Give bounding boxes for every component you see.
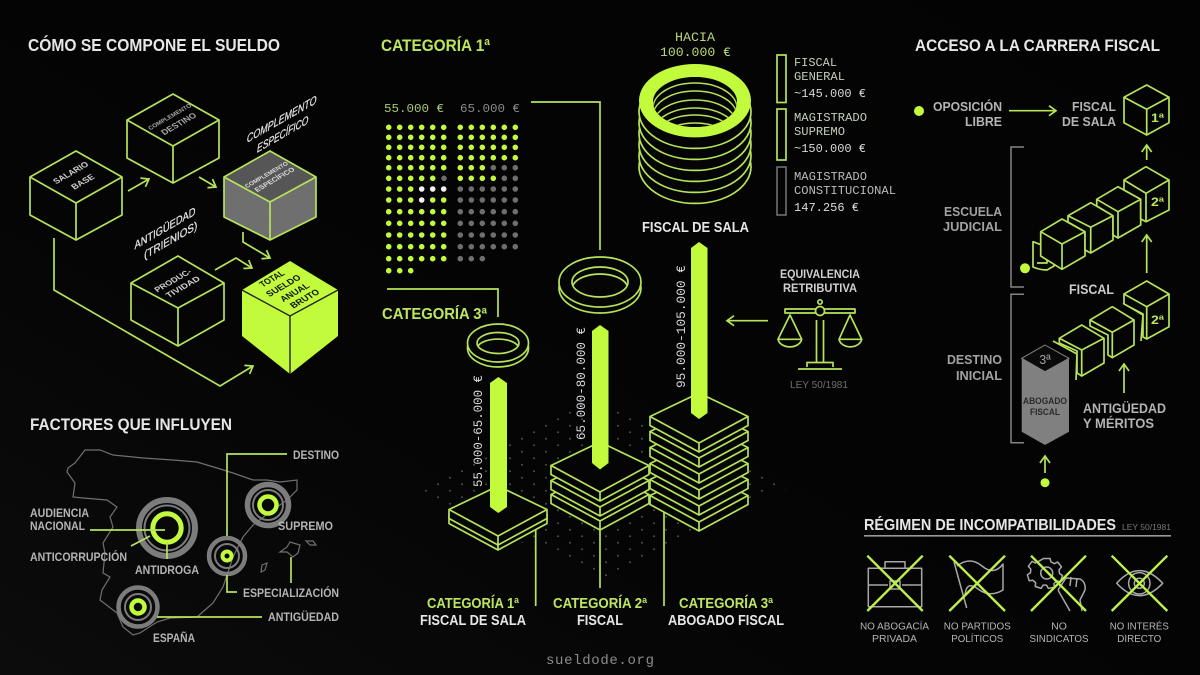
cube: total sueldo anual bruto: SUELDO: [264, 273, 304, 299]
label: complemento específico: ESPECÍFICO: [257, 113, 308, 156]
label: categoría 1ª fiscal de sala: FISCAL DE SALA: [420, 613, 526, 629]
map labels: DESTINO: [293, 448, 339, 462]
label: categoría 2ª fiscal: [553, 595, 648, 629]
cube: complemento destino: COMPLEMENTO: [147, 103, 193, 132]
label: antigüedad trienios: ANTIGÜEDAD: [135, 206, 195, 252]
label: antigüedad y méritos: Y MÉRITOS: [1083, 416, 1154, 431]
cubes: fiscal: [1053, 281, 1169, 380]
panel: régimen de incompatibilidades: [860, 517, 1172, 645]
bar: 65.000-80.000 €: [574, 325, 608, 470]
arrow: ingreso a 3ª: [1044, 456, 1046, 473]
bracket: destino inicial: [1011, 294, 1024, 443]
leader lines: [90, 454, 291, 617]
arrow to pillar: [727, 320, 768, 322]
map labels: NACIONAL: [30, 519, 85, 533]
label: no partidos políticos: [944, 620, 1011, 645]
arrow: oposición a fiscal de sala: [1009, 110, 1056, 112]
ring: categoría 2ª: [559, 257, 641, 313]
label: escuela judicial: JUDICIAL: [943, 219, 1002, 234]
cube: total sueldo anual bruto: [242, 261, 338, 374]
legend: comparación salarial: GENERAL: [794, 70, 845, 84]
panel: composición del sueldo: [28, 34, 338, 386]
panel: factores que influyen: [30, 415, 339, 645]
rings: audiencia nacional: [139, 500, 195, 556]
icon: no abogacía privada: [867, 556, 923, 611]
map labels: AUDIENCIA: [30, 506, 89, 520]
bar: 65.000-80.000 €: 65.000-80.000 €: [574, 327, 589, 440]
label: destino inicial: [947, 352, 1002, 383]
cube: 1ª: [1124, 85, 1169, 135]
legend: comparación salarial: CONSTITUCIONAL: [794, 184, 896, 198]
map labels: [30, 448, 339, 645]
label: no abogacía privada: PRIVADA: [872, 633, 917, 645]
label: categoría 3ª abogado fiscal: [668, 595, 784, 629]
label: escuela judicial: [943, 204, 1003, 234]
bar: 55.000-65.000 €: 55.000-65.000 €: [471, 375, 486, 487]
dot: ingreso: [1040, 478, 1050, 487]
label: escuela judicial: ESCUELA: [944, 204, 1003, 219]
block: 3ª abogado fiscal: ABOGADO: [1023, 396, 1067, 407]
cube: total sueldo anual bruto: TOTAL: [258, 269, 287, 289]
legend: comparación salarial: MAGISTRADO: [794, 111, 867, 125]
rings: especialización: [209, 538, 245, 574]
label: antigüedad y méritos: ANTIGÜEDAD: [1083, 401, 1166, 416]
dot: oposición libre: [914, 106, 924, 116]
label: ley 50/1981: LEY 50/1981: [790, 379, 848, 391]
label: no abogacía privada: [860, 620, 929, 645]
leader lines from stacks: [536, 508, 664, 606]
label: categoría 2ª fiscal: CATEGORÍA 2ª: [553, 595, 648, 612]
ring stack: fiscal de sala: [639, 64, 751, 203]
legend: comparación salarial: MAGISTRADO: [794, 170, 867, 184]
dot: inicio escuela judicial: [1020, 263, 1030, 273]
label: categoría 3ª abogado fiscal: ABOGADO FISCAL: [668, 613, 784, 629]
label: oposición libre: OPOSICIÓN: [933, 99, 1002, 114]
heading: acceso a la carrera fiscal: ACCESO A LA CARRERA FISCAL: [915, 36, 1160, 55]
label: no interés directo: NO INTERÉS: [1110, 620, 1169, 632]
label: categoría 2ª fiscal: FISCAL: [577, 613, 623, 629]
label: no sindicatos: SINDICATOS: [1030, 633, 1088, 645]
panel: acceso a la carrera fiscal: [914, 36, 1169, 487]
label: no partidos políticos: POLÍTICOS: [951, 632, 1003, 645]
legend: comparación salarial: ~145.000 €: [794, 87, 866, 101]
label: destino inicial: INICIAL: [956, 368, 1002, 383]
label: no interés directo: [1110, 620, 1169, 645]
heading: categoría 3ª: CATEGORÍA 3ª: [382, 304, 487, 323]
bracket: escuela judicial: [1011, 147, 1024, 287]
heading: régimen de incompatibilidades: RÉGIMEN DE INCOMPATIBILIDADES: [864, 517, 1116, 534]
label: oposición libre: [933, 99, 1002, 129]
label: hacia 100.000 €: [660, 31, 731, 60]
block: 3ª abogado fiscal: 3ª: [1039, 353, 1051, 367]
ring: categoría 3ª: [468, 324, 528, 367]
cube: productividad: PRODUC-: [152, 267, 194, 294]
label: antigüedad y méritos: [1083, 401, 1166, 431]
cube: productividad: [131, 256, 224, 346]
map: España: [67, 450, 316, 635]
legend: comparación salarial: [777, 55, 896, 215]
cube: total sueldo anual bruto: ANUAL: [278, 282, 312, 304]
icon: no interés directo: [1112, 556, 1167, 611]
cube: salario base: BASE: [69, 173, 97, 191]
bar: 55.000-65.000 €: [471, 375, 507, 513]
block: 3ª abogado fiscal: [1022, 345, 1069, 445]
cubes: escuela judicial: [1033, 167, 1169, 270]
label: fiscal de sala: DE SALA: [1062, 114, 1117, 129]
label: no abogacía privada: NO ABOGACÍA: [860, 620, 929, 632]
label: hacia 100.000 €: HACIA: [675, 31, 716, 45]
map labels: ANTICORRUPCIÓN: [30, 549, 127, 564]
label: 65.000 €: 65.000 €: [460, 102, 520, 116]
label: fiscal de sala: FISCAL: [1072, 99, 1116, 114]
rings: antigüedad: [118, 588, 158, 626]
icon: no partidos políticos: [949, 556, 1005, 611]
arrow: 2ª a 1ª: [1146, 145, 1148, 160]
footer: sueldode.org: sueldode.org: [546, 653, 654, 669]
map labels: ANTIDROGA: [135, 563, 199, 577]
connector: categoría 3ª a anillo: [387, 289, 498, 317]
label: destino inicial: DESTINO: [947, 352, 1002, 367]
stack: categoría 1ª: [449, 486, 547, 550]
label: no sindicatos: [1030, 620, 1088, 645]
connector: rango a anillo 2: [531, 102, 600, 250]
heading: equivalencia retributiva: EQUIVALENCIA: [780, 269, 860, 281]
label: hacia 100.000 €: 100.000 €: [660, 46, 731, 60]
stack: categoría 3ª: [650, 393, 748, 531]
note: ley 50/1981: LEY 50/1981: [1122, 523, 1172, 532]
heading: cómo se compone el sueldo: CÓMO SE COMPONE EL SUELDO: [28, 34, 280, 55]
cube: total sueldo anual bruto: BRUTO: [288, 288, 322, 311]
bar: 95.000-105.000 €: 95.000-105.000 €: [674, 265, 689, 388]
cube: complemento específico: ESPECÍFICO: [253, 166, 297, 194]
cube: complemento destino: DESTINO: [159, 111, 199, 137]
label: 55.000 €: 55.000 €: [384, 102, 444, 116]
label: no partidos políticos: NO PARTIDOS: [944, 620, 1011, 632]
legend: comparación salarial: FISCAL: [794, 56, 837, 70]
icon: no sindicatos: [1027, 556, 1086, 611]
legend: comparación salarial: SUPREMO: [794, 125, 845, 139]
arrows: flujo hacia el total: [54, 177, 270, 386]
label: fiscal: FISCAL: [1069, 282, 1114, 297]
panel: categorías y salarios: [381, 31, 896, 669]
label: oposición libre: LIBRE: [965, 114, 1002, 129]
arrow: fiscal a 2ª: [1146, 235, 1148, 273]
label: fiscal de sala: [1062, 99, 1117, 129]
label: categoría 3ª abogado fiscal: CATEGORÍA 3ª: [679, 595, 774, 612]
map labels: SUPREMO: [278, 519, 333, 533]
cube: complemento específico: [224, 151, 316, 240]
cube: salario base: [30, 151, 122, 240]
label: categoría 1ª fiscal de sala: [420, 595, 526, 629]
label: antigüedad trienios: (TRIENIOS): [144, 220, 197, 262]
cube: productividad: TIVIDAD: [164, 274, 203, 299]
icon: balanza: [778, 300, 862, 369]
label: no interés directo: DIRECTO: [1117, 633, 1161, 645]
label: fiscal de sala: FISCAL DE SALA: [642, 220, 749, 236]
legend: comparación salarial: 147.256 €: [794, 201, 859, 215]
isometric dot floor: [416, 395, 788, 583]
legend: comparación salarial: ~150.000 €: [794, 142, 866, 156]
cube: salario base: SALARIO: [51, 160, 91, 186]
rings: supremo: [248, 484, 288, 526]
arrow: antigüedad y méritos: [1123, 364, 1125, 393]
dot chart: rangos salariales: [389, 127, 516, 271]
cube: complemento destino: [127, 94, 219, 183]
map labels: ESPECIALIZACIÓN: [243, 585, 339, 600]
heading: equivalencia retributiva: [780, 269, 860, 295]
heading: factores que influyen: FACTORES QUE INFLUYEN: [30, 415, 232, 434]
block: 3ª abogado fiscal: FISCAL: [1030, 407, 1060, 418]
map labels: ESPAÑA: [153, 630, 195, 645]
cube: 1ª: 1ª: [1151, 111, 1165, 125]
cubes: fiscal: 2ª: [1151, 313, 1165, 327]
map labels: ANTIGÜEDAD: [268, 609, 339, 624]
bar: 95.000-105.000 €: [674, 242, 708, 419]
heading: equivalencia retributiva: RETRIBUTIVA: [783, 283, 857, 295]
cubes: escuela judicial: 2ª: [1151, 195, 1165, 209]
panel: equivalencia retributiva: [727, 269, 862, 391]
cube: complemento específico: COMPLEMENTO: [244, 161, 290, 190]
label: no sindicatos: NO: [1051, 620, 1067, 632]
label: complemento específico: COMPLEMENTO: [247, 94, 317, 146]
heading: categoría 1ª: CATEGORÍA 1ª: [381, 36, 491, 55]
stack: categoría 2ª: [551, 442, 649, 530]
label: categoría 1ª fiscal de sala: CATEGORÍA 1ª: [427, 595, 520, 612]
